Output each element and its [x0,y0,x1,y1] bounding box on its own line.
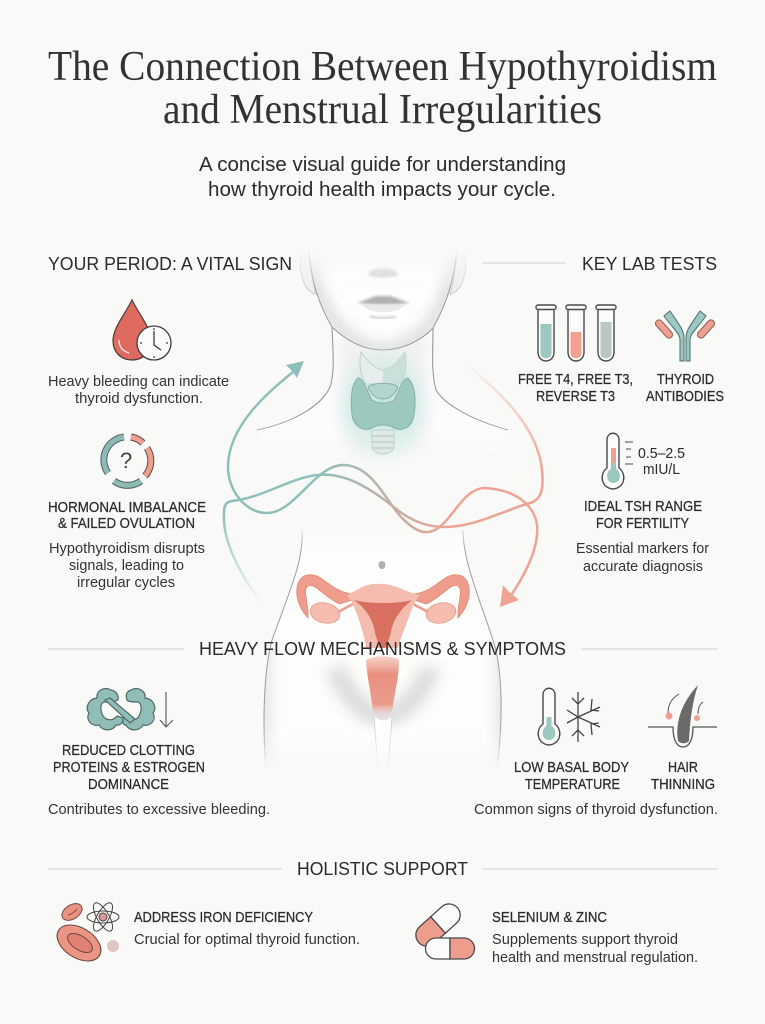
label: free t4 t3: REVERSE T3 [536,389,615,405]
text: heavy bleeding: Heavy bleeding can indicate [48,374,229,390]
label: hormonal imbalance [48,500,206,532]
infographic canvas [48,50,724,965]
icon: antibody [654,311,716,361]
label: low basal body temperature [514,760,629,793]
label: free t4 t3: FREE T4, FREE T3, [518,372,633,388]
arrow: teal to salmon, fading at both ends [224,362,543,605]
nose [368,268,398,278]
label: low basal body temperature: LOW BASAL BODY [514,760,629,776]
icon: broken cycle with question mark [104,437,151,485]
label: hormonal imbalance: HORMONAL IMBALANCE [48,500,206,516]
text: selenium and zinc: health and menstrual regulation. [492,950,698,966]
label: ideal tsh range [584,499,702,532]
heading: key lab tests: KEY LAB TESTS [582,253,717,274]
label: hair thinning [651,760,715,793]
text: address iron deficiency [134,910,360,948]
label: hormonal imbalance: & FAILED OVULATION [58,516,195,532]
text: hypothyroidism disrupts: signals, leading to [69,558,184,574]
heading: your period: YOUR PERIOD: A VITAL SIGN [48,253,292,274]
text: hypothyroidism disrupts: Hypothyroidism disrupts [49,541,205,557]
text: hypothyroidism disrupts [49,541,205,591]
icon: blood drop and clock [113,300,171,360]
central body illustration [257,240,508,770]
label: free t4 t3 [518,372,633,405]
icon: hair follicle [648,685,717,747]
label: reduced clotting [53,743,205,793]
neck and shoulders [256,327,508,430]
text: essential markers: accurate diagnosis [583,559,703,575]
face [300,252,466,350]
label: thyroid antibodies: ANTIBODIES [646,389,724,405]
label: thyroid antibodies: THYROID [657,372,714,388]
icon: down arrow [160,692,173,727]
text: selenium and zinc: SELENIUM & ZINC [492,910,607,926]
panel: selenium and zinc [411,899,698,966]
text: contributes: Contributes to excessive bleeding. [48,802,270,818]
panel: your period [48,300,229,591]
title: The Connection Between Hypothyroidism [48,44,717,90]
heading: heavy flow mechanisms: HEAVY FLOW MECHANISMS & SYMPTOMS [199,638,566,659]
icon: low temperature thermometer [538,688,560,745]
text: selenium and zinc: Supplements support thyroid [492,932,678,948]
text: address iron deficiency: Crucial for optimal thyroid function. [134,932,360,948]
label: hair thinning: THINNING [651,777,715,793]
panel: symptoms [474,685,718,818]
navel [378,561,386,569]
arrow: teal head to salmon head [228,361,537,607]
text: tsh range value: 0.5–2.5 [638,445,685,462]
icon: broken cycle with question mark: ? [120,448,132,473]
text: selenium and zinc [492,910,698,966]
lips [357,296,410,304]
text: tsh range value: mIU/L [643,461,680,478]
icon: capsules [411,899,474,959]
label: hair thinning: HAIR [668,760,698,776]
label: reduced clotting: PROTEINS & ESTROGEN [53,760,205,776]
panel: clotting [48,689,270,818]
text: hypothyroidism disrupts: irregular cycles [77,575,175,591]
text: address iron deficiency: ADDRESS IRON DEFICIENCY [134,910,313,926]
title [48,44,717,133]
title: and Menstrual Irregularities [163,87,602,133]
label: thyroid antibodies [646,372,724,405]
uterus and ovaries [297,575,469,716]
icon: snowflake [567,692,600,742]
label: reduced clotting: DOMINANCE [88,777,169,793]
icon: red blood cells and atom [51,900,119,968]
pelvis [263,525,503,770]
thyroid gland [327,337,439,473]
label: ideal tsh range: FOR FERTILITY [596,516,689,532]
subtitle [199,153,566,201]
subtitle: A concise visual guide for understanding [199,153,566,176]
label: reduced clotting: REDUCED CLOTTING [62,743,195,759]
text: heavy bleeding [48,374,229,407]
panel: key lab tests [518,305,724,575]
text: heavy bleeding: thyroid dysfunction. [75,391,203,407]
icon: clotting protein [87,689,155,730]
panel: iron deficiency [51,900,360,968]
icon: three test tubes [536,305,616,361]
heading: holistic support: HOLISTIC SUPPORT [297,858,468,879]
label: low basal body temperature: TEMPERATURE [525,777,620,793]
text: tsh range value [638,445,685,478]
text: essential markers: Essential markers for [576,541,709,557]
text: common signs: Common signs of thyroid dysfunction. [474,802,718,818]
label: ideal tsh range: IDEAL TSH RANGE [584,499,702,515]
subtitle: how thyroid health impacts your cycle. [208,178,556,201]
icon: tsh thermometer [602,433,633,489]
text: essential markers [576,541,709,575]
